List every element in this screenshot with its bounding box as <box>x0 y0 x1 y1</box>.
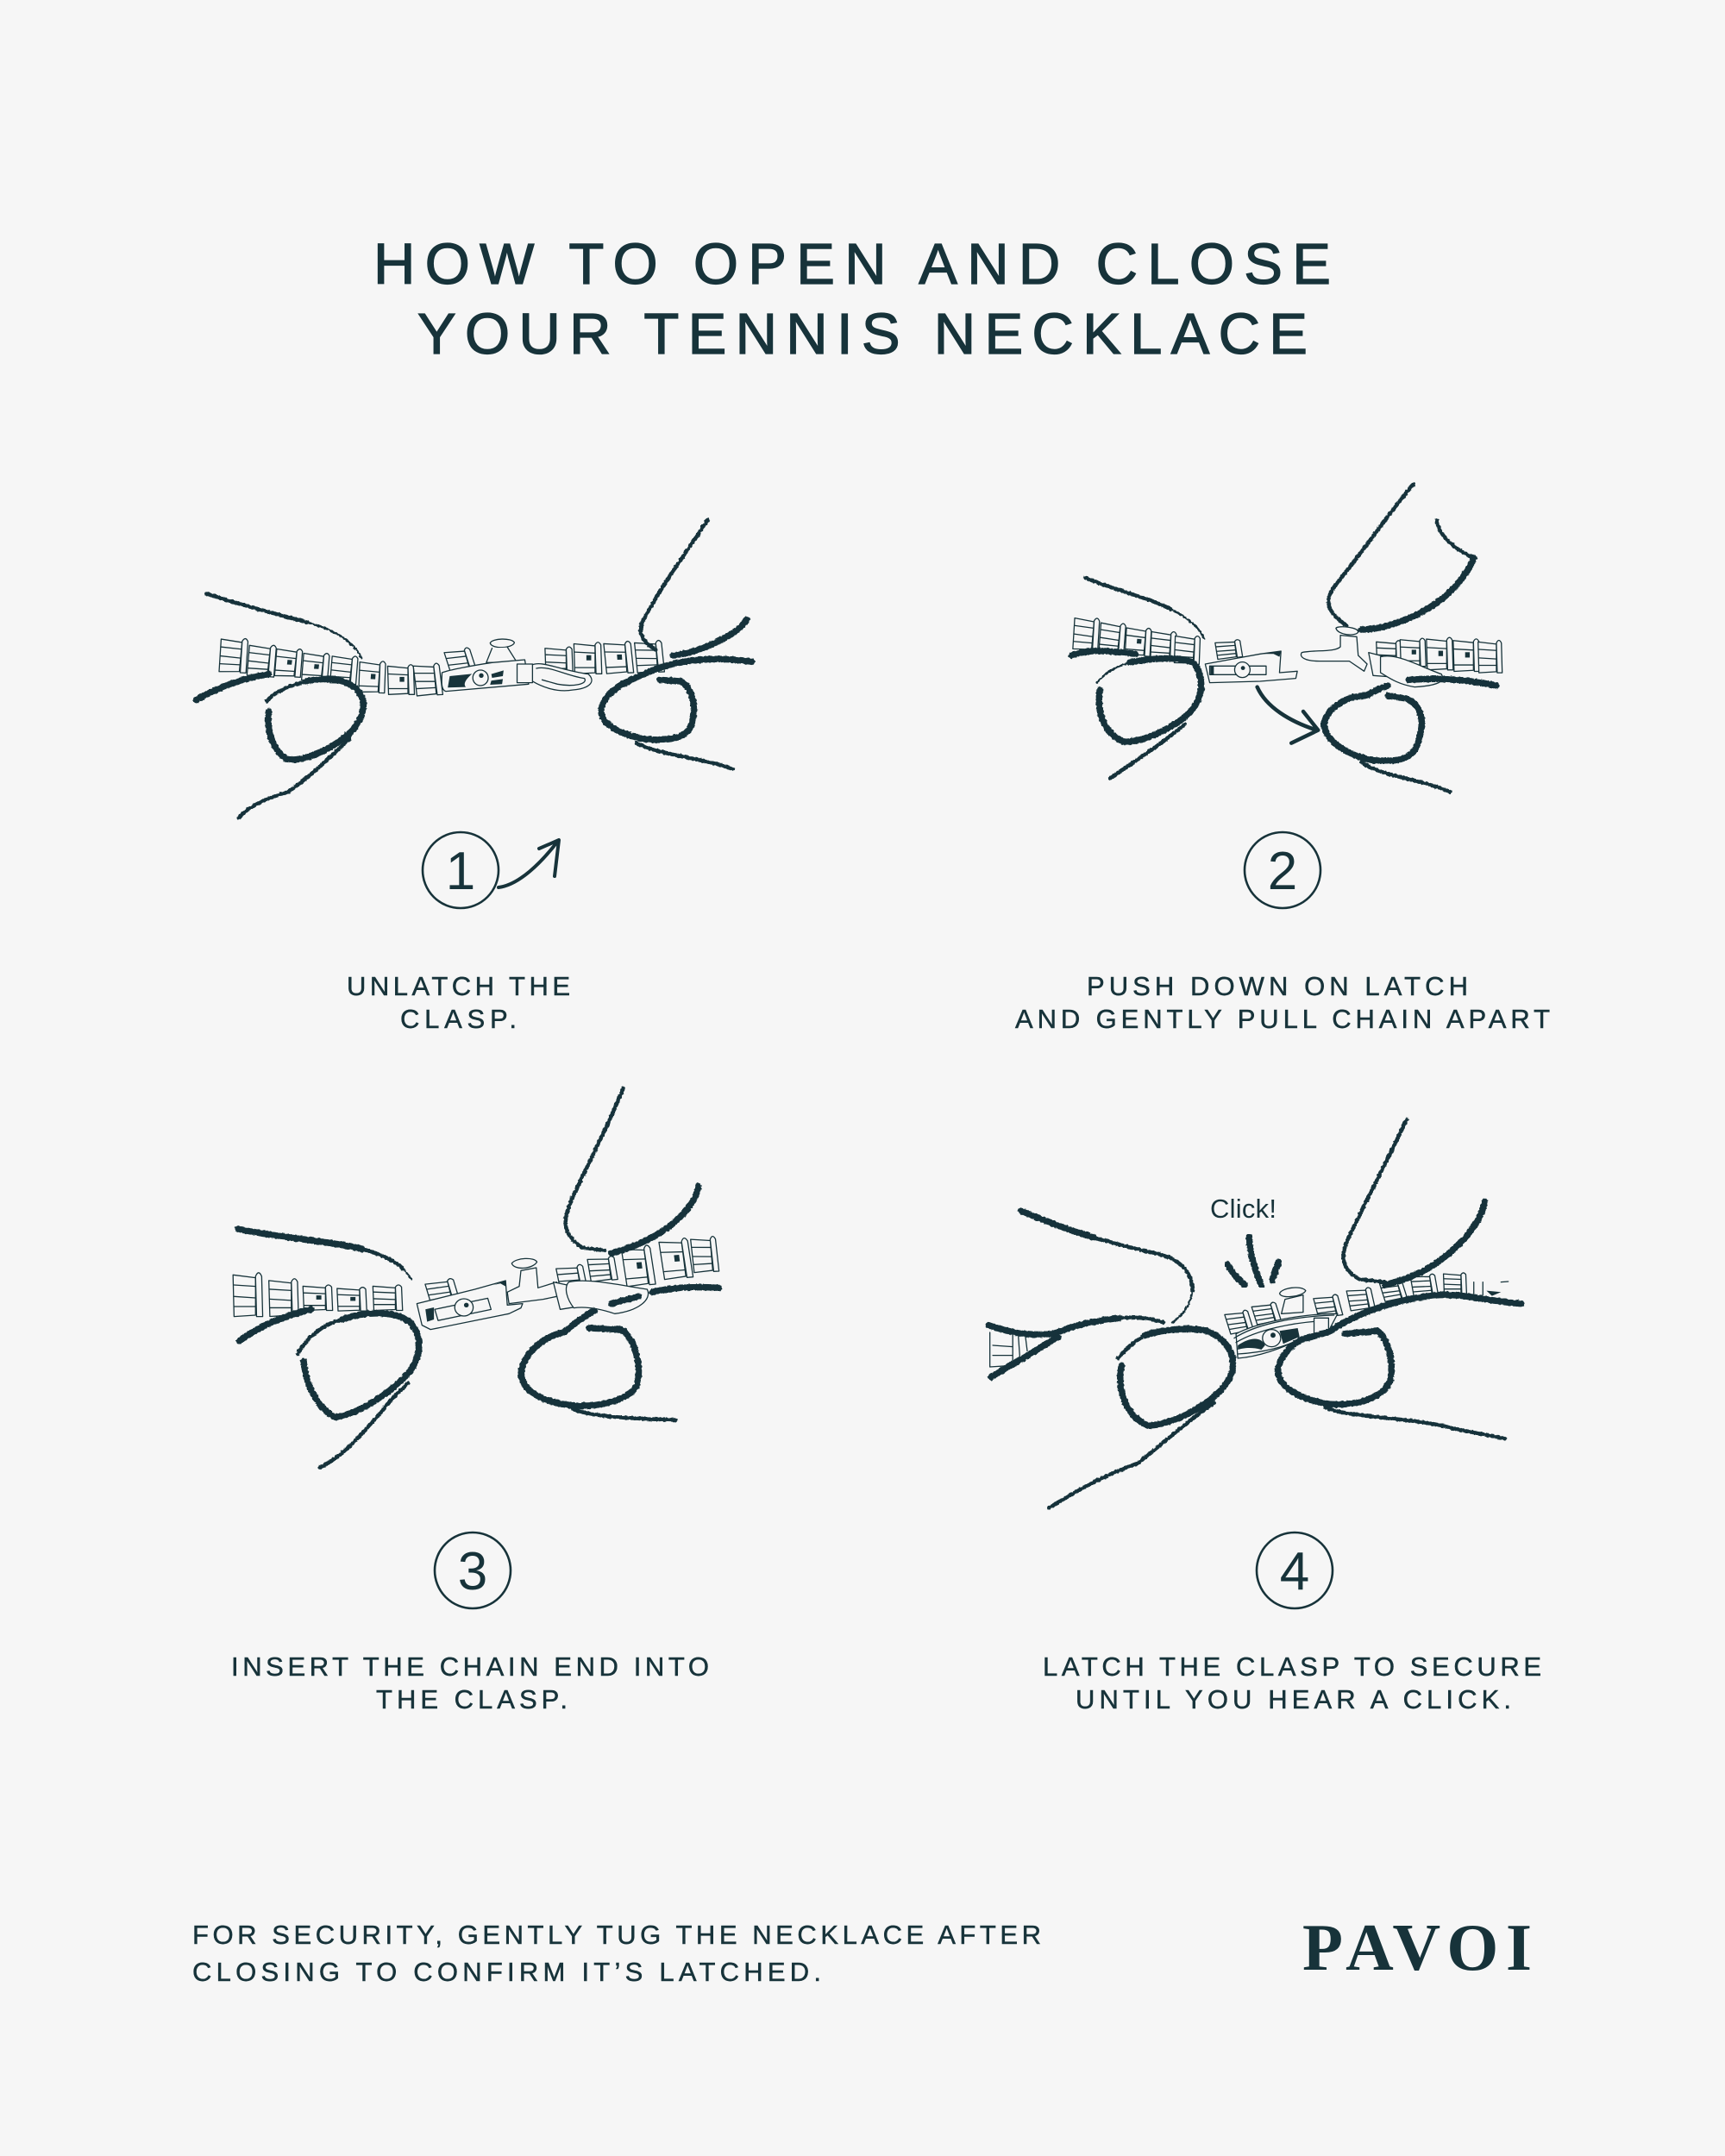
hands <box>988 1119 1521 1507</box>
caption 2: PUSH DOWN ON LATCH <box>1087 971 1468 1001</box>
hands <box>1071 485 1496 792</box>
illustration: fingers unlatching the clasp <box>197 520 752 818</box>
caption 4 <box>1043 1651 1541 1714</box>
click label: Click! <box>1210 1194 1276 1224</box>
caption 3: THE CLASP. <box>376 1684 568 1714</box>
caption 1: UNLATCH THE <box>347 971 570 1001</box>
number 2 <box>1245 832 1320 908</box>
illustration: pushing down on the latch <box>1071 485 1502 792</box>
caption 4: LATCH THE CLASP TO SECURE <box>1043 1651 1541 1682</box>
caption 2 <box>1015 971 1550 1034</box>
caption 1 <box>347 971 570 1034</box>
panel: step 4 <box>988 1119 1541 1714</box>
caption 1: CLASP. <box>400 1004 517 1034</box>
number 3: 3 <box>458 1542 487 1601</box>
footer note: CLOSING TO CONFIRM IT’S LATCHED. <box>192 1957 821 1987</box>
chain and clasp <box>218 637 664 696</box>
number 2: 2 <box>1268 842 1297 901</box>
caption 3: INSERT THE CHAIN END INTO <box>231 1651 709 1682</box>
title <box>373 232 1331 367</box>
number 4: 4 <box>1280 1542 1309 1601</box>
panel: step 3 <box>231 1088 719 1714</box>
number 4 <box>1257 1532 1333 1608</box>
icon: click burst lines <box>1227 1237 1279 1285</box>
caption 4: UNTIL YOU HEAR A CLICK. <box>1076 1684 1511 1714</box>
title: HOW TO OPEN AND CLOSE <box>373 232 1331 297</box>
footer note: FOR SECURITY, GENTLY TUG THE NECKLACE AFTER <box>192 1920 1041 1950</box>
caption 2: AND GENTLY PULL CHAIN APART <box>1015 1004 1550 1034</box>
illustration: latching the clasp <box>988 1119 1521 1507</box>
chain and clasp <box>233 1236 719 1330</box>
arrow: up and to the right <box>499 840 559 887</box>
separated chain and clasp <box>1072 617 1502 687</box>
hands <box>197 520 752 818</box>
arrow: pull apart <box>1258 687 1318 743</box>
hands <box>238 1088 718 1468</box>
logo: PAVOI: PAVOI <box>1302 1910 1532 1984</box>
title: YOUR TENNIS NECKLACE <box>417 302 1308 367</box>
panel: step 2 <box>1015 485 1550 1034</box>
chain and closed clasp <box>990 1273 1509 1367</box>
caption 3 <box>231 1651 709 1714</box>
number 1: 1 <box>446 842 475 901</box>
illustration: inserting the chain end <box>233 1088 719 1468</box>
number 3 <box>435 1532 511 1608</box>
footer note <box>192 1920 1041 1987</box>
number 1 <box>423 832 499 908</box>
panel: step 1 <box>197 520 752 1034</box>
